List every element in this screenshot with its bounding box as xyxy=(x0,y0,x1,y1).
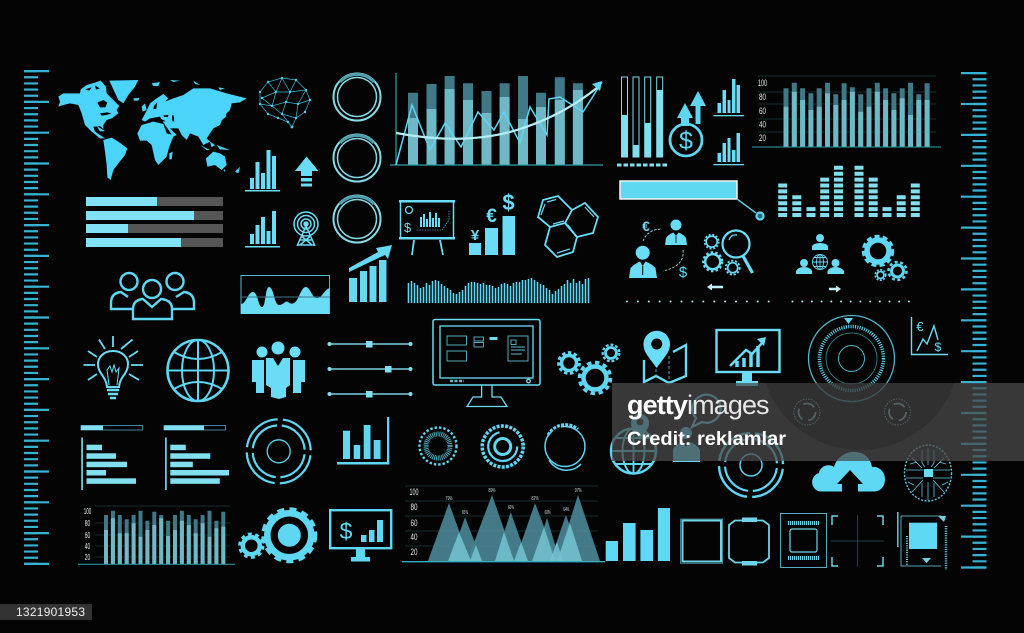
frame three: chip xyxy=(780,514,826,568)
icon: people money exchange: $ xyxy=(679,264,688,281)
stacked column chart top right: 100 xyxy=(758,78,767,88)
icon: up arrow xyxy=(295,156,318,186)
stacked column chart bottom left: 20 xyxy=(85,553,91,562)
currency bars: € xyxy=(486,206,497,227)
stacked column chart bottom left: 60 xyxy=(85,531,91,540)
triangle peak chart: 68% xyxy=(545,510,551,516)
triangle peak chart: 82% xyxy=(532,496,539,502)
triangle peak chart: 79% xyxy=(446,496,453,502)
equalizer xyxy=(783,165,915,217)
currency bars: $ xyxy=(502,190,515,215)
triangle peak chart: 64% xyxy=(563,507,570,513)
vertical progress columns xyxy=(617,77,668,165)
icon: large and small gears xyxy=(240,509,315,561)
triangle peak chart xyxy=(402,486,605,562)
mini bar chart bottom xyxy=(714,133,744,165)
icon: team outline xyxy=(111,273,194,319)
image id tag: 1321901953 xyxy=(16,605,85,619)
watermark credit: Credit: reklamlar xyxy=(627,429,787,450)
icon: monitor dollar xyxy=(330,510,391,562)
currency line chart xyxy=(912,317,948,354)
sliders xyxy=(328,341,412,398)
icon: arc ring xyxy=(545,425,585,470)
triangle peak chart: 40 xyxy=(410,532,418,542)
left ruler xyxy=(31,70,36,566)
icon: person with speech bubble xyxy=(673,395,721,462)
mini bar chart top xyxy=(714,79,744,116)
icon: radio tower xyxy=(294,212,318,246)
main combo chart xyxy=(390,73,603,165)
icon: ring under watermark xyxy=(719,433,783,497)
icon: globe under watermark xyxy=(611,414,656,474)
icon: three gears xyxy=(864,236,906,280)
stacked column chart bottom left xyxy=(78,506,235,564)
triangle peak chart: 60 xyxy=(410,518,418,528)
triangle peak chart: 89% xyxy=(488,488,496,494)
icon: people money exchange xyxy=(629,218,688,281)
callout box xyxy=(620,181,764,220)
left arrow xyxy=(707,284,723,290)
triangle peak chart: 80 xyxy=(410,502,418,512)
triangle peak chart: 66% xyxy=(508,505,514,511)
icon: presentation board xyxy=(399,200,455,255)
right ruler xyxy=(974,72,980,569)
icon: global network people xyxy=(796,234,844,274)
horizontal bar chart one xyxy=(81,426,142,490)
watermark band xyxy=(612,383,1024,461)
spectrum bars xyxy=(408,278,588,303)
icon: people money exchange: € xyxy=(642,218,650,234)
currency line chart: € xyxy=(916,319,924,334)
watermark logo: gettyimages xyxy=(627,390,769,420)
icon: coin with up arrows xyxy=(670,91,706,156)
hud ring 2 xyxy=(334,134,380,182)
hud dial xyxy=(808,316,894,402)
stacked column chart top right: 40 xyxy=(759,120,766,130)
icon: gears and magnifier xyxy=(703,230,752,275)
stacked column chart top right xyxy=(752,76,941,147)
small bar chart xyxy=(245,150,280,192)
currency bars xyxy=(469,190,515,255)
triangle peak chart: 65% xyxy=(462,510,468,516)
area chart xyxy=(241,276,330,314)
currency line chart: $ xyxy=(935,340,942,354)
four column chart xyxy=(606,508,670,561)
stacked column chart bottom left: 80 xyxy=(85,519,91,528)
icon: dotted dial xyxy=(420,428,456,464)
icon: cloud upload xyxy=(812,452,885,497)
icon: desktop monitor xyxy=(433,320,540,406)
frame five: device xyxy=(898,512,946,570)
icon: segmented dial xyxy=(482,426,523,467)
stacked column chart bottom left: 40 xyxy=(85,542,91,551)
icon: circuit brain xyxy=(904,445,952,501)
stacked column chart bottom left: 100 xyxy=(84,507,92,516)
icon: neural brain xyxy=(259,77,311,128)
icon: team of three xyxy=(252,342,305,399)
progress bars xyxy=(86,197,223,247)
icon: presentation board: $ xyxy=(404,220,412,235)
right arrow xyxy=(829,286,841,292)
icon: monitor growth chart xyxy=(716,330,780,386)
triangle peak chart: 100 xyxy=(410,487,418,497)
triangle peak chart: 20 xyxy=(410,547,418,557)
icon: map pin xyxy=(644,331,686,383)
icon: globe xyxy=(168,340,228,401)
icon: faint dial right xyxy=(884,399,910,425)
framed bar chart xyxy=(337,417,389,464)
icon: three gears group xyxy=(558,345,619,394)
image id tag xyxy=(0,604,92,620)
growth bar chart with arrow xyxy=(349,245,392,302)
icon: monitor dollar: $ xyxy=(340,518,353,544)
hud ring 1 xyxy=(334,74,380,120)
dotted line right xyxy=(792,300,909,302)
world map xyxy=(58,80,247,180)
dotted line left xyxy=(627,300,769,302)
triangle peak chart: 97% xyxy=(575,488,582,494)
stacked column chart top right: 80 xyxy=(759,92,766,102)
frame one xyxy=(680,519,722,564)
icon: faint dial left xyxy=(794,399,820,425)
small bar chart two xyxy=(245,211,280,248)
icon: target ring xyxy=(247,419,311,483)
frame two xyxy=(729,518,769,566)
frame four: crosshair xyxy=(831,515,884,567)
currency bars: ¥ xyxy=(471,227,480,244)
icon: coin with up arrows: $ xyxy=(679,127,693,155)
horizontal bar chart two xyxy=(164,426,229,490)
hud ring 3 xyxy=(334,196,380,242)
icon: light bulb xyxy=(84,336,143,398)
stacked column chart top right: 20 xyxy=(759,133,766,143)
stacked column chart top right: 60 xyxy=(759,106,766,116)
icon: hexagon molecule xyxy=(538,196,598,257)
